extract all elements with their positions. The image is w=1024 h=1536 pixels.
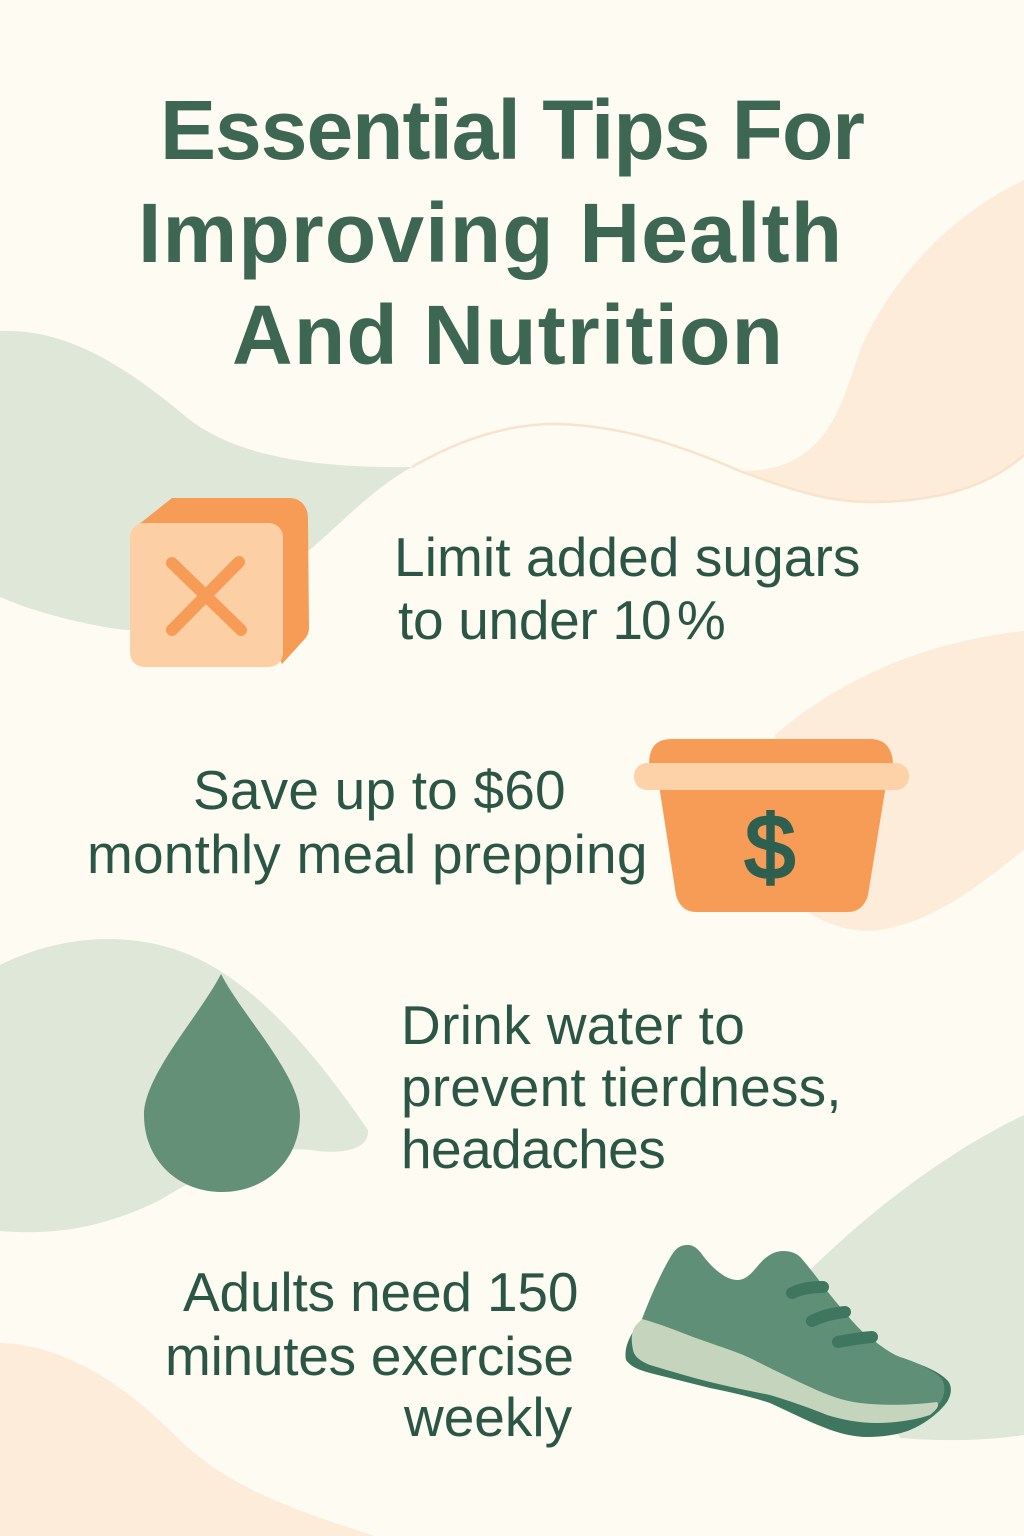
icon: meal prep container with dollar: $ bbox=[745, 798, 795, 898]
icon: meal prep container with dollar bbox=[634, 739, 909, 912]
title: Essential Tips For bbox=[160, 83, 864, 177]
icon: sugar cube with X bbox=[130, 498, 309, 667]
text: drink water: prevent tierdness, bbox=[401, 1056, 842, 1118]
text: save up to $60: Save up to $60 bbox=[193, 759, 566, 821]
title bbox=[138, 83, 864, 382]
text: limit added sugars: to under 10 % bbox=[398, 589, 724, 651]
icon: water drop bbox=[144, 974, 300, 1192]
text: adults need 150 bbox=[165, 1261, 578, 1448]
text: save up to $60: monthly meal prepping bbox=[87, 823, 648, 885]
text: adults need 150: weekly bbox=[404, 1386, 572, 1448]
text: drink water: Drink water to bbox=[401, 994, 745, 1056]
text: limit added sugars: Limit added sugars bbox=[394, 526, 861, 588]
text: adults need 150: minutes exercise bbox=[165, 1325, 574, 1387]
title: And Nutrition bbox=[232, 288, 784, 382]
text: save up to $60 bbox=[87, 759, 648, 885]
text: drink water bbox=[401, 994, 842, 1180]
icon: running shoe bbox=[625, 1245, 951, 1437]
title: Improving Health bbox=[138, 186, 843, 280]
text: limit added sugars bbox=[394, 526, 861, 651]
text: drink water: headaches bbox=[401, 1118, 665, 1180]
text: adults need 150: Adults need 150 bbox=[183, 1261, 578, 1323]
